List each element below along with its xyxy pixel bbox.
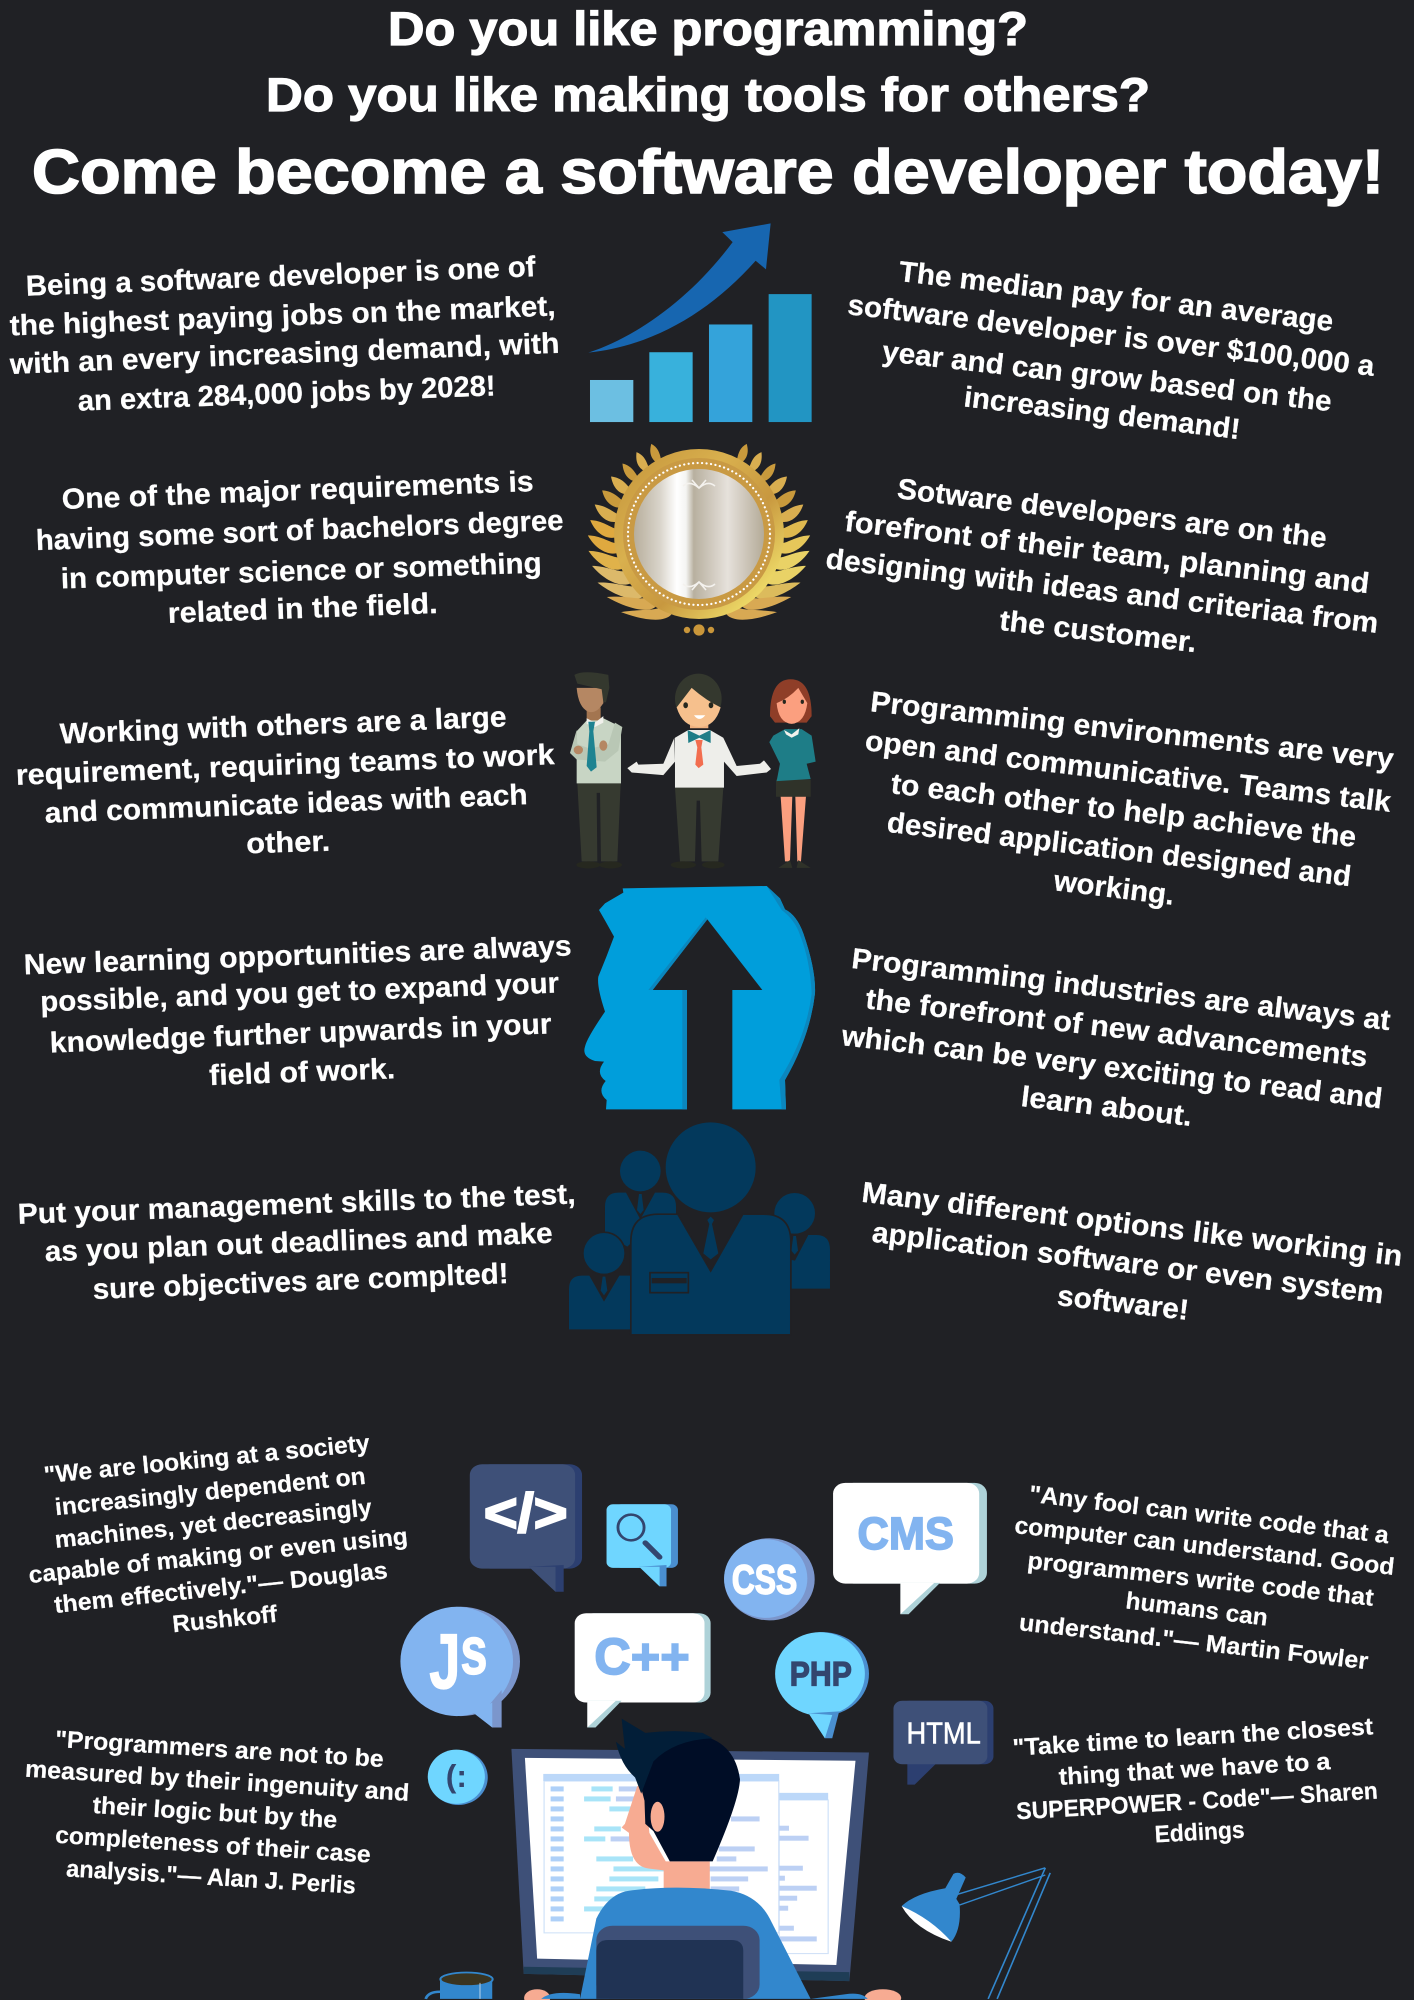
text: teamwork: and communicate ideas with each	[44, 779, 528, 830]
text: quote Sharen Eddings: Eddings	[1154, 1817, 1245, 1849]
text: teamwork: requirement, requiring teams to work	[15, 739, 556, 792]
woman with crossed arms	[769, 679, 816, 868]
text: environments: Programming environments are very	[869, 686, 1395, 776]
man with crossed arms	[570, 672, 622, 868]
bubble: CMS	[833, 1483, 987, 1614]
text: median pay: software developer is over $100,000 a	[846, 289, 1377, 383]
text: median pay: year and can grow based on the	[881, 336, 1333, 418]
text: environments	[863, 686, 1395, 912]
text: degree requirement: having some sort of bachelors degree	[35, 505, 564, 557]
silver disc	[634, 469, 764, 599]
text: team leadership: designing with ideas and criteriaa from	[824, 543, 1380, 640]
text: median pay: The median pay for an average	[897, 256, 1335, 338]
icon: business team silhouettes	[569, 1122, 830, 1334]
bubble: smiley	[428, 1750, 488, 1805]
text: environments: open and communicative. Teams talk	[863, 725, 1393, 819]
text: quote Sharen Eddings: SUPERPOWER - Code"— Sharen	[1016, 1778, 1379, 1825]
text: quote Alan J. Perlis: analysis."— Alan J. Perlis	[65, 1855, 356, 1900]
bar 4	[769, 294, 812, 422]
text: teamwork	[15, 701, 556, 860]
text: learning: New learning opportunities are always	[23, 930, 572, 982]
text: learning	[23, 930, 572, 1092]
text: management: sure objectives are complted!	[92, 1258, 509, 1306]
text: environments: desired application designed and	[885, 807, 1353, 893]
text: median pay	[846, 256, 1377, 446]
text: quote Martin Fowler: computer can understand. Good	[1013, 1512, 1396, 1581]
bar 2	[649, 352, 693, 422]
text: learning: field of work.	[209, 1053, 396, 1092]
icon: rising bar chart with arrow	[588, 223, 812, 422]
bubble: C++	[575, 1613, 711, 1727]
text: quote Sharen Eddings	[1012, 1713, 1379, 1849]
text: management: Put your management skills to the test,	[17, 1178, 576, 1231]
bubble: Js	[400, 1607, 520, 1727]
bar 3	[709, 324, 752, 422]
bubble: magnifier	[607, 1504, 678, 1586]
text: quote Douglas Rushkoff	[27, 1430, 409, 1638]
text: environments: to each other to help achieve the	[889, 768, 1358, 854]
text: quote Sharen Eddings: thing that we have to a	[1058, 1748, 1332, 1791]
text: job demand: with an every increasing demand, with	[8, 328, 560, 381]
text: options	[860, 1177, 1404, 1327]
text: job demand: an extra 284,000 jobs by 2028!	[77, 370, 496, 418]
text: quote Alan J. Perlis	[24, 1726, 410, 1900]
gold ring	[614, 449, 784, 619]
bubble: PHP	[775, 1632, 869, 1738]
text: advancements: Programming industries are always at	[850, 943, 1392, 1037]
hands	[524, 1989, 901, 2000]
text: quote Alan J. Perlis: completeness of their case	[54, 1822, 372, 1869]
text: quote Alan J. Perlis: measured by their ingenuity and	[24, 1756, 410, 1807]
text: options: software!	[1056, 1280, 1190, 1327]
text: quote Douglas Rushkoff: increasingly dependent on	[54, 1463, 367, 1521]
title	[32, 2, 1384, 207]
icon: three team members	[570, 672, 816, 868]
text: quote Martin Fowler: programmers write code that	[1026, 1547, 1375, 1612]
text: team leadership: forefront of their team, planning and	[843, 506, 1371, 600]
desk lamp	[902, 1868, 1050, 1999]
coffee mug	[426, 1972, 493, 1999]
text: options: Many different options like working in	[860, 1177, 1404, 1273]
text: advancements: the forefront of new advancements	[864, 983, 1369, 1074]
medal dots	[684, 627, 690, 633]
bubble: smiley: (:	[446, 1758, 467, 1794]
text: quote Douglas Rushkoff: capable of making or even using	[27, 1523, 409, 1589]
text: team leadership	[824, 473, 1380, 659]
text: quote Martin Fowler: understand."— Martin Fowler	[1018, 1609, 1370, 1675]
text: teamwork: other.	[246, 826, 331, 860]
developer figure	[580, 1719, 811, 1999]
bubble: code tag: </>	[484, 1481, 568, 1543]
text: environments: working.	[1051, 865, 1176, 912]
bubble: HTML	[893, 1701, 993, 1785]
bar 1	[590, 380, 633, 422]
text: job demand	[8, 251, 560, 418]
text: advancements	[839, 943, 1392, 1133]
bubble: CSS	[724, 1538, 815, 1620]
text: quote Alan J. Perlis: "Programmers are not to be	[54, 1726, 384, 1773]
title: Come become a software developer today!	[32, 138, 1384, 207]
bubble: Js: s	[460, 1614, 488, 1689]
text: median pay: increasing demand!	[962, 381, 1242, 446]
text: quote Douglas Rushkoff: "We are looking at a society	[43, 1430, 371, 1489]
text: team leadership: Sotware developers are on the	[896, 473, 1328, 555]
text: quote Martin Fowler: "Any fool can write code that a	[1028, 1481, 1391, 1549]
icon: head profile with up arrow	[584, 886, 815, 1109]
monitor	[511, 1749, 869, 1981]
title: Do you like programming?	[388, 2, 1028, 55]
bubble: code tag	[470, 1464, 582, 1592]
text: learning: knowledge further upwards in your	[49, 1008, 552, 1060]
text: advancements: which can be very exciting to read and	[839, 1020, 1384, 1115]
text: teamwork: Working with others are a large	[59, 701, 507, 751]
text: degree requirement: One of the major requirements is	[61, 466, 534, 516]
bubble: CSS: CSS	[732, 1557, 797, 1603]
bubble: Js: J	[429, 1619, 460, 1705]
text: learning: possible, and you get to expand your	[40, 968, 560, 1019]
man with open arms	[627, 674, 771, 868]
bubble: C++: C++	[594, 1628, 690, 1685]
text: options: application software or even system	[870, 1217, 1385, 1310]
text: quote Douglas Rushkoff: them effectively."— Douglas	[53, 1557, 389, 1619]
title: Do you like making tools for others?	[266, 68, 1150, 121]
text: job demand: the highest paying jobs on the market,	[9, 291, 556, 342]
icon: gold medal with laurel	[588, 442, 810, 636]
text: quote Martin Fowler: humans can	[1124, 1587, 1269, 1632]
bubble: PHP: PHP	[790, 1656, 852, 1694]
illustration: developer at computer with language bubbles	[400, 1464, 1050, 2000]
text: quote Douglas Rushkoff: machines, yet decreasingly	[53, 1494, 374, 1554]
text: degree requirement: related in the field.	[167, 588, 438, 630]
text: management	[17, 1178, 576, 1306]
bubble: CMS: CMS	[858, 1508, 954, 1559]
text: quote Sharen Eddings: "Take time to learn the closest	[1012, 1713, 1374, 1762]
text: advancements: learn about.	[1019, 1081, 1194, 1133]
text: management: as you plan out deadlines and make	[44, 1218, 553, 1268]
text: quote Douglas Rushkoff: Rushkoff	[171, 1601, 279, 1638]
text: team leadership: the customer.	[998, 605, 1198, 659]
text: quote Martin Fowler	[1013, 1481, 1396, 1675]
bubble: HTML: HTML	[907, 1717, 981, 1751]
text: job demand: Being a software developer is one of	[25, 251, 536, 303]
text: degree requirement: in computer science or something	[60, 548, 542, 595]
text: degree requirement	[35, 466, 564, 630]
text: quote Alan J. Perlis: their logic but by the	[92, 1792, 338, 1834]
arrow	[588, 223, 771, 353]
